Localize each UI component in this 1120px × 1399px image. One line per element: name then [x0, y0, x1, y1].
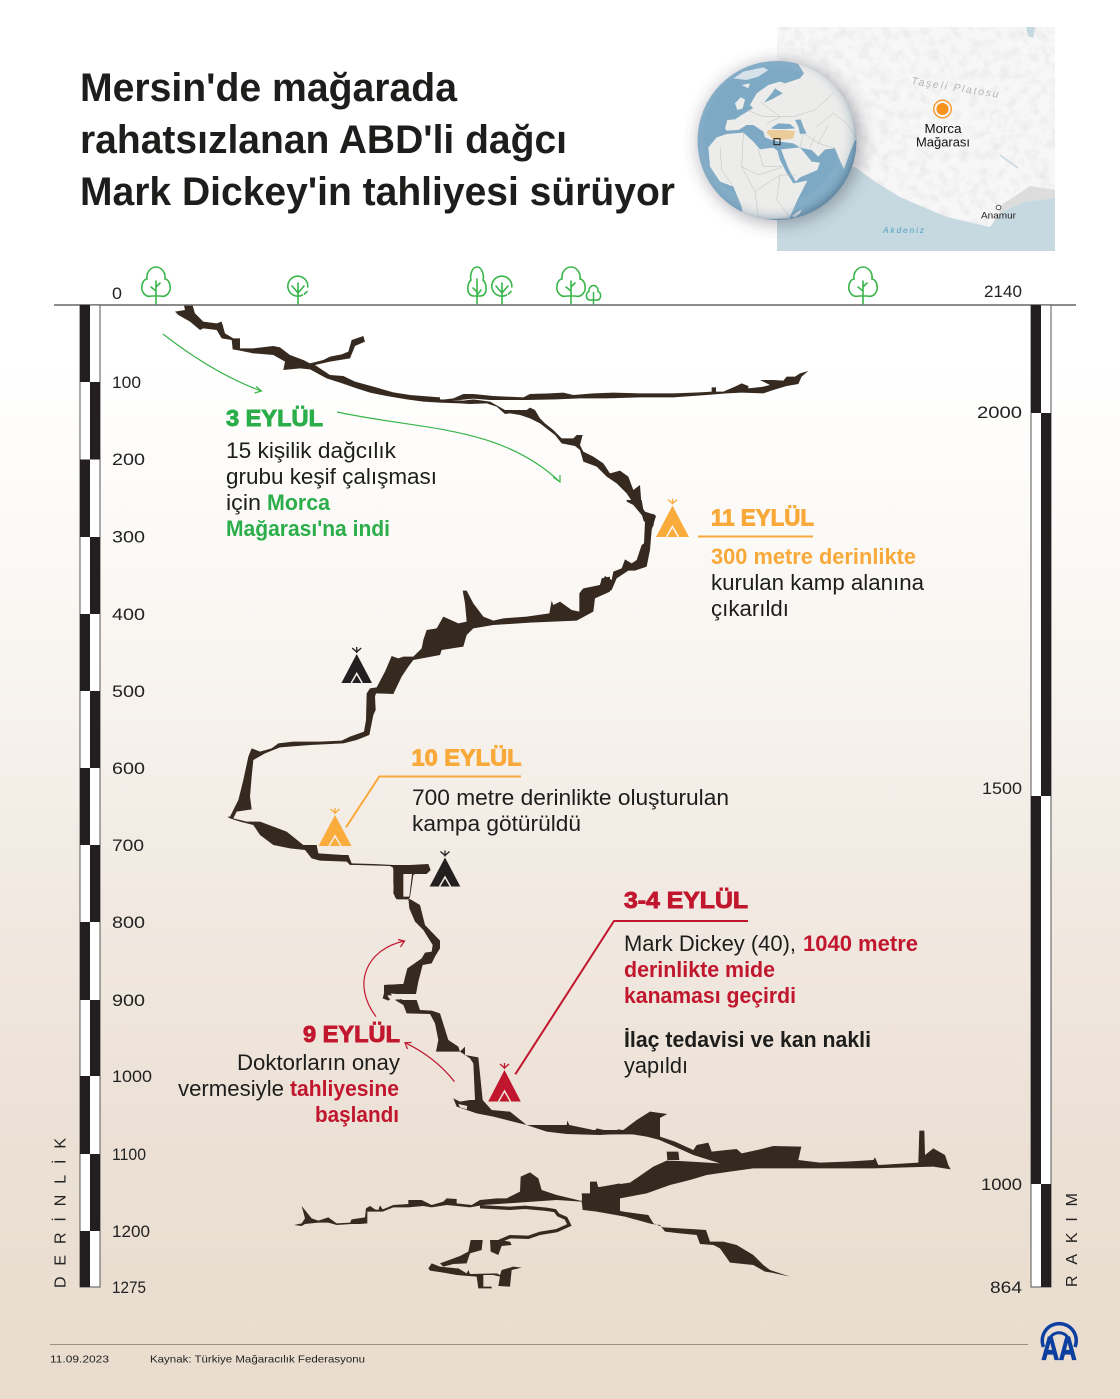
map label: Anamur: Anamur [981, 210, 1016, 222]
callout: 3-4 Eylül: derinlikte mide [624, 957, 775, 982]
callout: 11 Eylül: 11 EYLÜL [711, 504, 814, 530]
locator map [777, 27, 1055, 251]
callout: 11 Eylül: çıkarıldı [711, 596, 789, 621]
arrow: descent direction 2 [337, 412, 560, 482]
callout: 11 Eylül [698, 504, 925, 621]
depth scale numbers [112, 284, 152, 1297]
altitude scale numbers: 1500 [982, 779, 1022, 798]
cave: eastern gallery and trunk [580, 1112, 951, 1277]
callout: 9 Eylül: vermesiyle [178, 1076, 284, 1101]
title: rahatsızlanan ABD'li dağcı [80, 118, 567, 162]
cave: passage near 300 m camp [579, 500, 656, 600]
callout: 10 Eylül: 10 EYLÜL [412, 744, 522, 770]
callout: 10 Eylül: 700 metre derinlikte oluşturulan [412, 785, 729, 810]
callout: 10 Eylül [346, 744, 729, 836]
marker: Morca Mağarası [934, 100, 951, 118]
footer [50, 1344, 1028, 1366]
depth scale numbers: 500 [112, 682, 145, 701]
callout: 3 Eylül: için [226, 490, 261, 515]
depth scale numbers: 100 [112, 373, 141, 392]
map label: Anamur [981, 205, 1016, 222]
map label: Morca Mağarası: Morca [924, 122, 962, 136]
depth scale numbers: 1000 [112, 1067, 152, 1086]
callout: 3 Eylül: Morca [267, 490, 331, 515]
title: Mersin'de mağarada [80, 66, 458, 110]
icon: tree 2 [288, 276, 308, 304]
map label: Morca Mağarası: Mağarası [916, 136, 970, 150]
callout: 3-4 Eylül: 1040 metre [803, 931, 918, 956]
tent: 730 m camp [430, 850, 460, 886]
altitude scale numbers: 2140 [984, 282, 1022, 301]
callout: 9 Eylül: 9 EYLÜL [303, 1021, 400, 1047]
globe [697, 60, 860, 223]
callout: 3-4 Eylül: İlaç tedavisi ve kan nakli [624, 1027, 871, 1052]
depth scale [50, 284, 152, 1297]
arrow: descent direction 1 [163, 334, 262, 393]
map label: Morca Mağarası [916, 122, 970, 150]
icon: trees on surface [142, 267, 877, 304]
footer: Kaynak: Türkiye Mağaracılık Federasyonu [150, 1354, 365, 1366]
altitude scale numbers [977, 282, 1022, 1297]
arrow: evacuation upward curve [364, 940, 404, 1017]
tent: 300 m camp [656, 498, 689, 537]
axis title: Rakım: RAKIM [1064, 1193, 1081, 1287]
depth scale numbers: 600 [112, 759, 145, 778]
cave: lower descent to 1040 m [383, 864, 660, 1140]
icon: tree 6 [586, 286, 601, 304]
map label: Akdeniz: Akdeniz [882, 225, 925, 235]
footer: 11.09.2023 [50, 1354, 109, 1366]
icon: tree 7 [849, 267, 877, 304]
tent: 450 m camp [341, 647, 372, 683]
callout: 10 Eylül: kampa götürüldü [412, 811, 581, 836]
cave: middle section 400-700 m [227, 577, 610, 899]
callout: 3 Eylül: Mağarası'na indi [226, 516, 390, 541]
depth scale numbers: 700 [112, 836, 144, 855]
depth scale numbers: 0 [112, 284, 122, 303]
depth scale numbers: 1200 [112, 1222, 150, 1241]
callout: 3-4 Eylül: kanaması geçirdi [624, 983, 796, 1008]
depth scale numbers: 900 [112, 991, 145, 1010]
callout: 11 Eylül: 300 metre derinlikte [711, 544, 916, 569]
cave profile [175, 306, 951, 1288]
title [80, 66, 675, 214]
callout: 11 Eylül: kurulan kamp alanına [711, 570, 925, 595]
depth scale numbers: 1100 [112, 1145, 146, 1164]
callout: 3 Eylül: grubu keşif çalışması [226, 464, 437, 489]
depth scale numbers: 300 [112, 528, 145, 546]
altitude scale numbers: 2000 [977, 403, 1022, 422]
cave: lower western branches [294, 1172, 620, 1288]
icon: tree 3 [468, 267, 486, 304]
icon: tree 4 [492, 276, 512, 304]
arrow: evacuation start [405, 1042, 454, 1082]
callout: 3 Eylül: 15 kişilik dağcılık [226, 438, 397, 463]
callout: 9 Eylül [178, 1021, 400, 1127]
ground line [54, 304, 1076, 306]
altitude scale numbers: 864 [990, 1278, 1022, 1297]
callout: 9 Eylül: başlandı [315, 1102, 399, 1127]
tent: 1040 m camp [488, 1063, 521, 1102]
callout: 3 Eylül: 3 EYLÜL [226, 405, 323, 431]
cave: entrance passage [175, 306, 440, 403]
depth scale numbers: 1275 [112, 1278, 146, 1297]
logo: AA [1042, 1324, 1076, 1366]
depth scale numbers: 400 [112, 605, 145, 624]
callout: 3-4 Eylül: 3-4 EYLÜL [624, 887, 748, 913]
callout: 9 Eylül: Doktorların onay [237, 1050, 400, 1075]
logo: AA: AA [1042, 1330, 1076, 1366]
map label: Taşeli Platosu: Taşeli Platosu [911, 75, 999, 101]
callout: 3-4 Eylül: yapıldı [624, 1053, 688, 1078]
altitude scale [977, 282, 1081, 1297]
callout: 3-4 Eylül: Mark Dickey (40), [624, 931, 796, 956]
title: Mark Dickey'in tahliyesi sürüyor [80, 170, 675, 214]
cave: horizontal branch and descent [440, 371, 808, 527]
icon: tree 5 [557, 267, 585, 304]
callout: 3-4 Eylül [515, 887, 918, 1078]
altitude scale numbers: 1000 [981, 1175, 1022, 1194]
depth scale numbers: 800 [112, 913, 145, 932]
callout: 9 Eylül: tahliyesine [290, 1076, 399, 1101]
tent: 700 m camp [318, 808, 352, 846]
callout: 3 Eylül [226, 405, 437, 541]
depth scale numbers: 200 [112, 450, 145, 469]
axis title: Derinlik: DERİNLİK [50, 1138, 70, 1288]
icon: tree 1 [142, 267, 170, 304]
